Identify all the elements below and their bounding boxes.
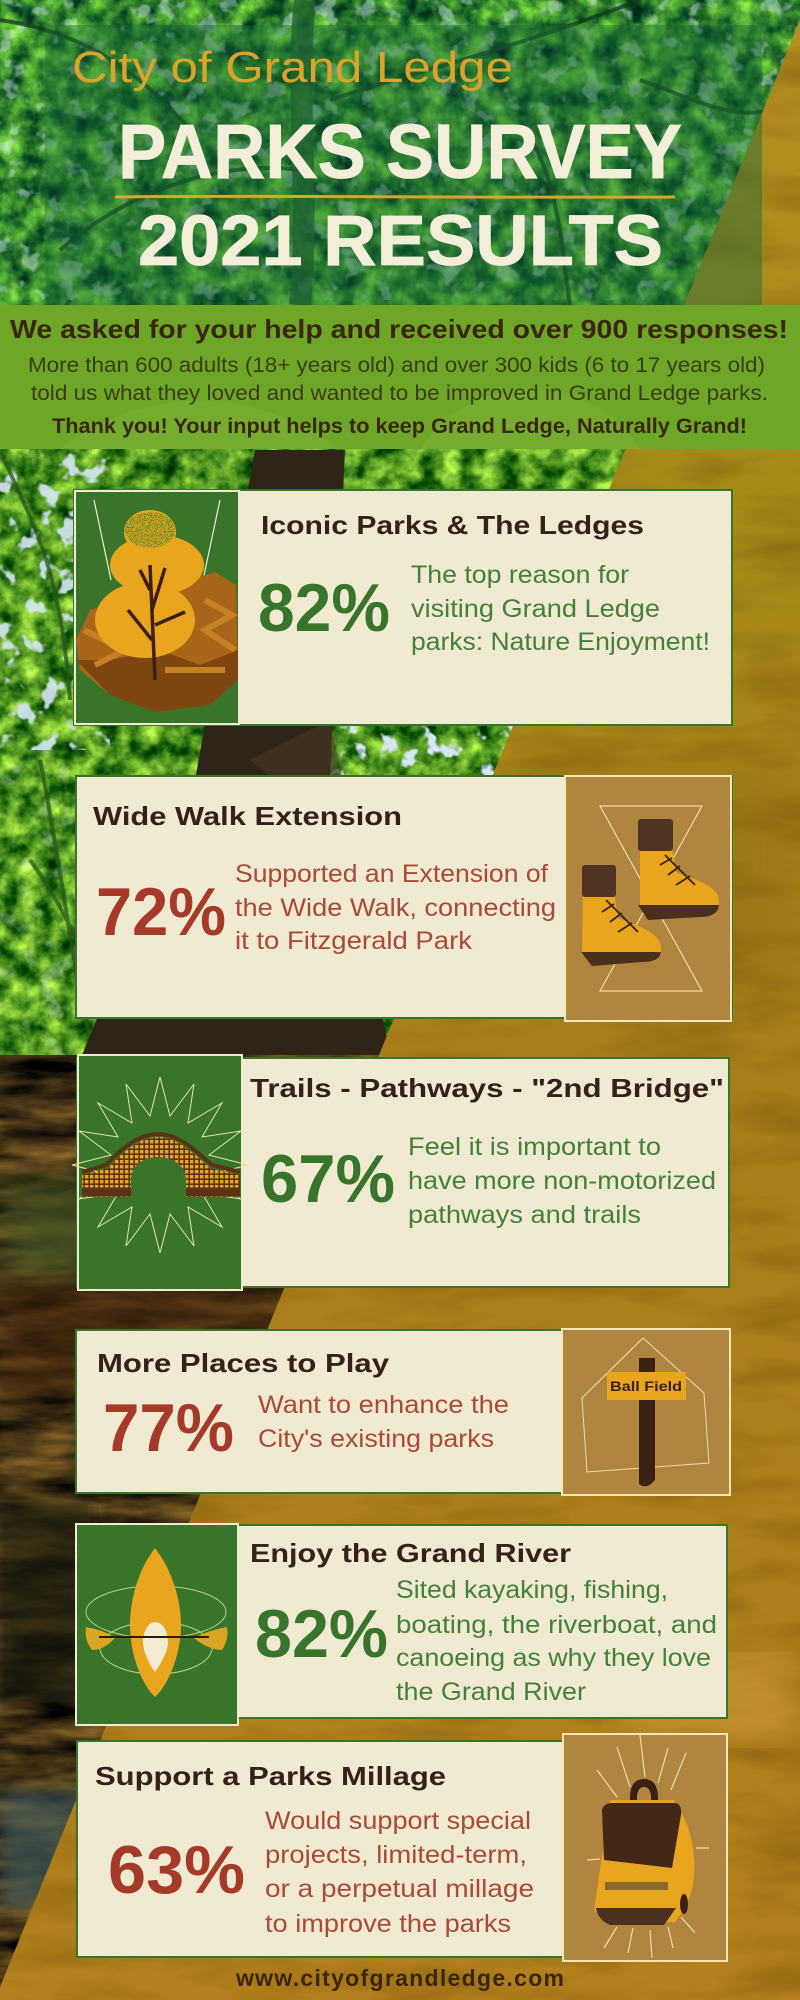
intro band — [0, 305, 800, 449]
description: to improve the parks — [265, 1910, 511, 1938]
heading: Enjoy the Grand River — [250, 1538, 571, 1568]
middle foliage — [0, 449, 626, 1055]
footer website address: www.cityofgrandledge.com — [235, 1965, 564, 1991]
title: 2021 Results: 2021 RESULTS — [138, 202, 663, 281]
heading: Trails - Pathways - "2nd Bridge" — [250, 1073, 724, 1103]
description: Feel it is important to — [408, 1133, 661, 1161]
description — [235, 860, 556, 955]
heading: Iconic Parks & The Ledges — [261, 510, 644, 540]
stat 77%: 77% — [103, 1390, 234, 1466]
intro body line 2: told us what they loved and wanted to be improved in Grand Ledge parks. — [31, 382, 768, 405]
description — [396, 1576, 717, 1706]
panel: Wide Walk Extension — [76, 776, 732, 1021]
description: have more non-motorized — [408, 1167, 716, 1195]
description: parks: Nature Enjoyment! — [411, 628, 710, 656]
heading: More Places to Play — [97, 1348, 390, 1378]
description — [258, 1391, 509, 1453]
description: the Wide Walk, connecting — [235, 894, 556, 922]
description: Supported an Extension of — [235, 860, 548, 888]
rock face — [0, 1055, 379, 1986]
description: visiting Grand Ledge — [411, 595, 660, 623]
title: Parks Survey: PARKS SURVEY — [118, 109, 682, 195]
thank you line: Thank you! Your input helps to keep Grand Ledge, Naturally Grand! — [52, 415, 747, 438]
icon: kayak and paddle — [76, 1524, 238, 1725]
description — [411, 561, 710, 656]
description: The top reason for — [411, 561, 629, 589]
stat 63%: 63% — [108, 1832, 245, 1908]
panel: More Places to Play — [76, 1329, 730, 1495]
description: City's existing parks — [258, 1425, 494, 1453]
canopy foliage — [0, 0, 800, 305]
intro body line 1: More than 600 adults (18+ years old) and over 300 kids (6 to 17 years old) — [28, 354, 765, 377]
stat 67%: 67% — [261, 1141, 395, 1217]
sky patches — [0, 0, 800, 1080]
panel: Iconic Parks and The Ledges — [74, 490, 732, 725]
panel: Trails Pathways 2nd Bridge — [72, 1055, 729, 1290]
stat 82%: 82% — [255, 1596, 388, 1672]
description: Sited kayaking, fishing, — [396, 1576, 668, 1604]
heading: Support a Parks Millage — [95, 1761, 446, 1791]
description: it to Fitzgerald Park — [235, 927, 473, 955]
title underline — [115, 195, 675, 199]
description: Want to enhance the — [258, 1391, 509, 1419]
panel: Support a Parks Millage — [77, 1734, 727, 1961]
panel: Enjoy the Grand River — [76, 1524, 727, 1725]
description: canoeing as why they love — [396, 1644, 711, 1672]
translucent title panel — [45, 25, 762, 305]
icon: hiking boots — [565, 776, 731, 1021]
branches — [0, 0, 800, 1050]
icon: tree on rock ledge — [75, 491, 239, 724]
heading: Wide Walk Extension — [93, 801, 402, 831]
description: or a perpetual millage — [265, 1875, 534, 1903]
title: City of Grand Ledge: City of Grand Ledge — [72, 43, 513, 92]
icon: arched bridge — [72, 1055, 248, 1290]
description: Would support special — [265, 1807, 531, 1835]
intro headline: We asked for your help and received over 900 responses! — [10, 314, 788, 344]
icon: backpack — [563, 1734, 727, 1961]
icon: ball field sign — [562, 1329, 730, 1495]
tree trunk — [80, 450, 392, 1060]
description: the Grand River — [396, 1678, 586, 1706]
description — [265, 1807, 534, 1938]
description: boating, the riverboat, and — [396, 1611, 717, 1639]
description — [408, 1133, 716, 1229]
stat 82%: 82% — [258, 570, 390, 646]
description: projects, limited-term, — [265, 1841, 527, 1869]
stat 72%: 72% — [96, 874, 226, 950]
description: pathways and trails — [408, 1201, 641, 1229]
icon: ball field sign: Ball Field — [610, 1378, 682, 1394]
